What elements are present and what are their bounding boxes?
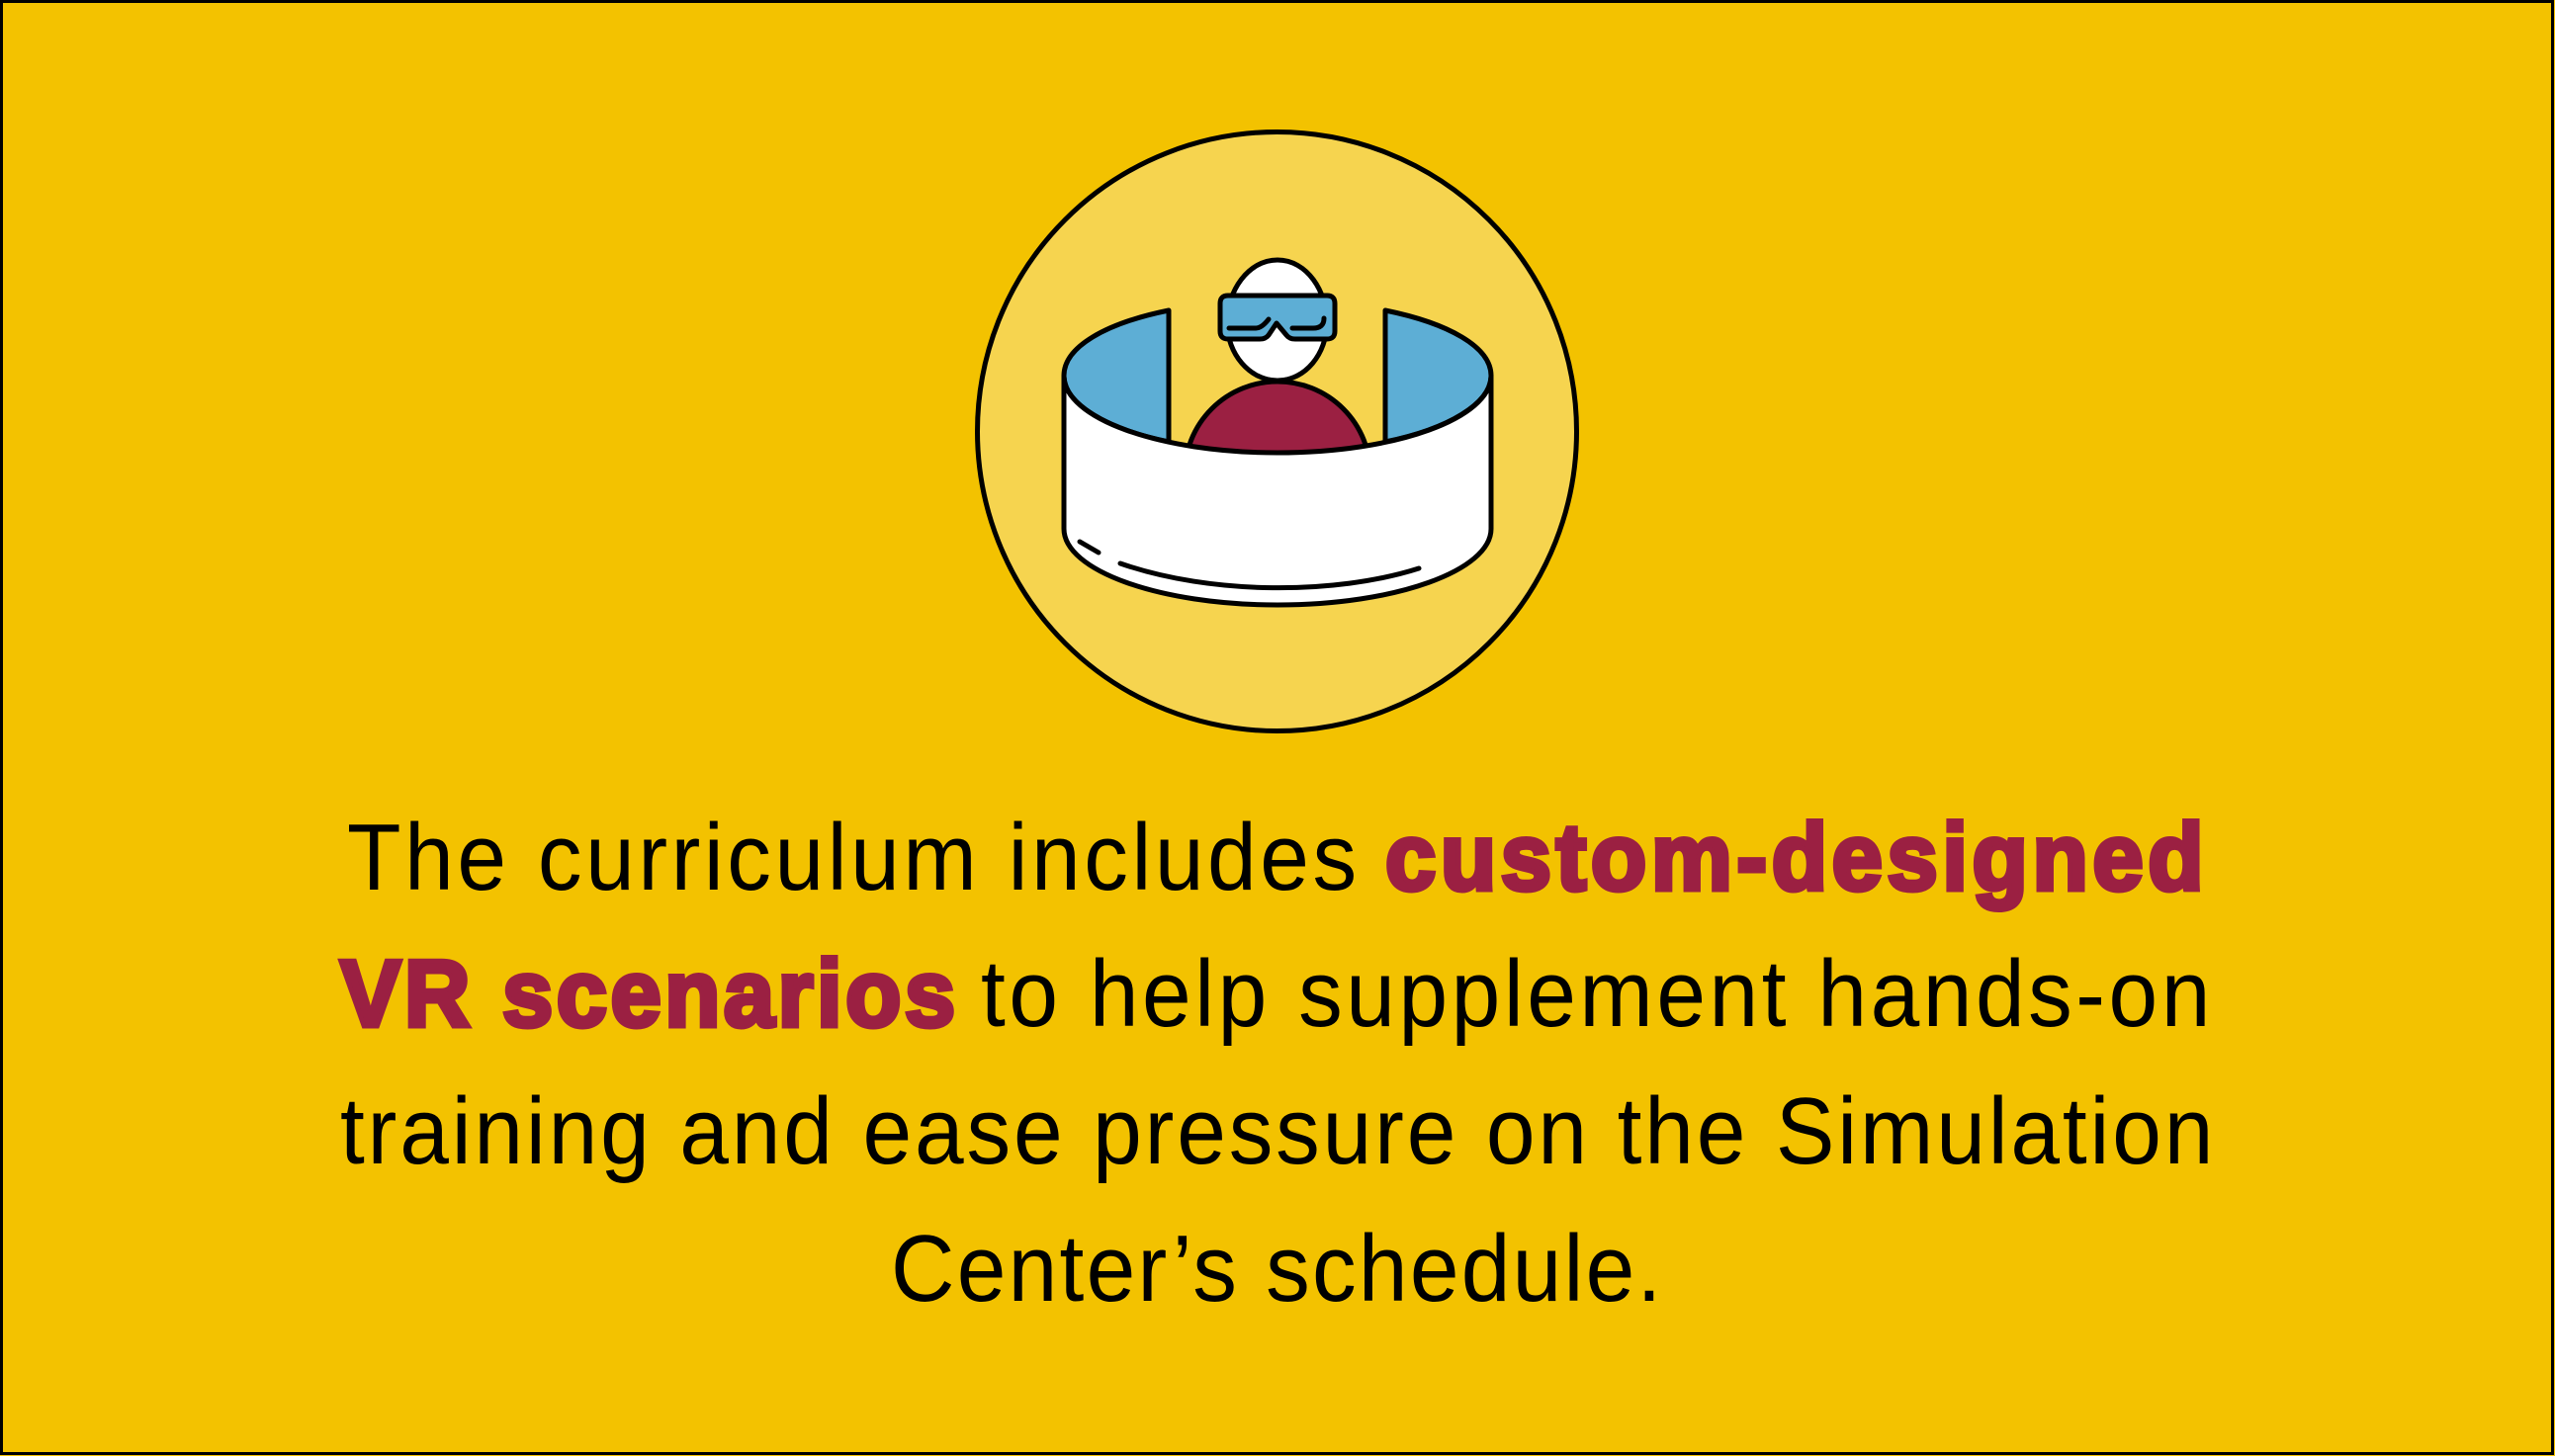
line 2 bold highlight: VR scenarios [340, 940, 955, 1046]
band highlight long [1120, 563, 1419, 588]
icon: person in VR headset inside wraparound screen [977, 132, 1576, 731]
left blue inner screen panel [1064, 310, 1169, 442]
white wraparound screen band [1064, 376, 1491, 605]
line 3: training and ease pressure on the Simulation [340, 1077, 2213, 1184]
line 2 regular: to help supplement hands-on [981, 940, 2210, 1047]
person body [1185, 382, 1370, 567]
line 4: Center’s schedule. [891, 1215, 1661, 1322]
line 1 bold highlight: custom-designed [1385, 804, 2204, 909]
body text block [340, 804, 2213, 1322]
line 1 regular: The curriculum includes [347, 804, 1357, 910]
person head [1227, 260, 1327, 381]
right blue inner screen panel [1385, 310, 1491, 442]
icon background circle [977, 132, 1576, 731]
band highlight short [1080, 542, 1099, 553]
VR goggles [1220, 296, 1335, 339]
